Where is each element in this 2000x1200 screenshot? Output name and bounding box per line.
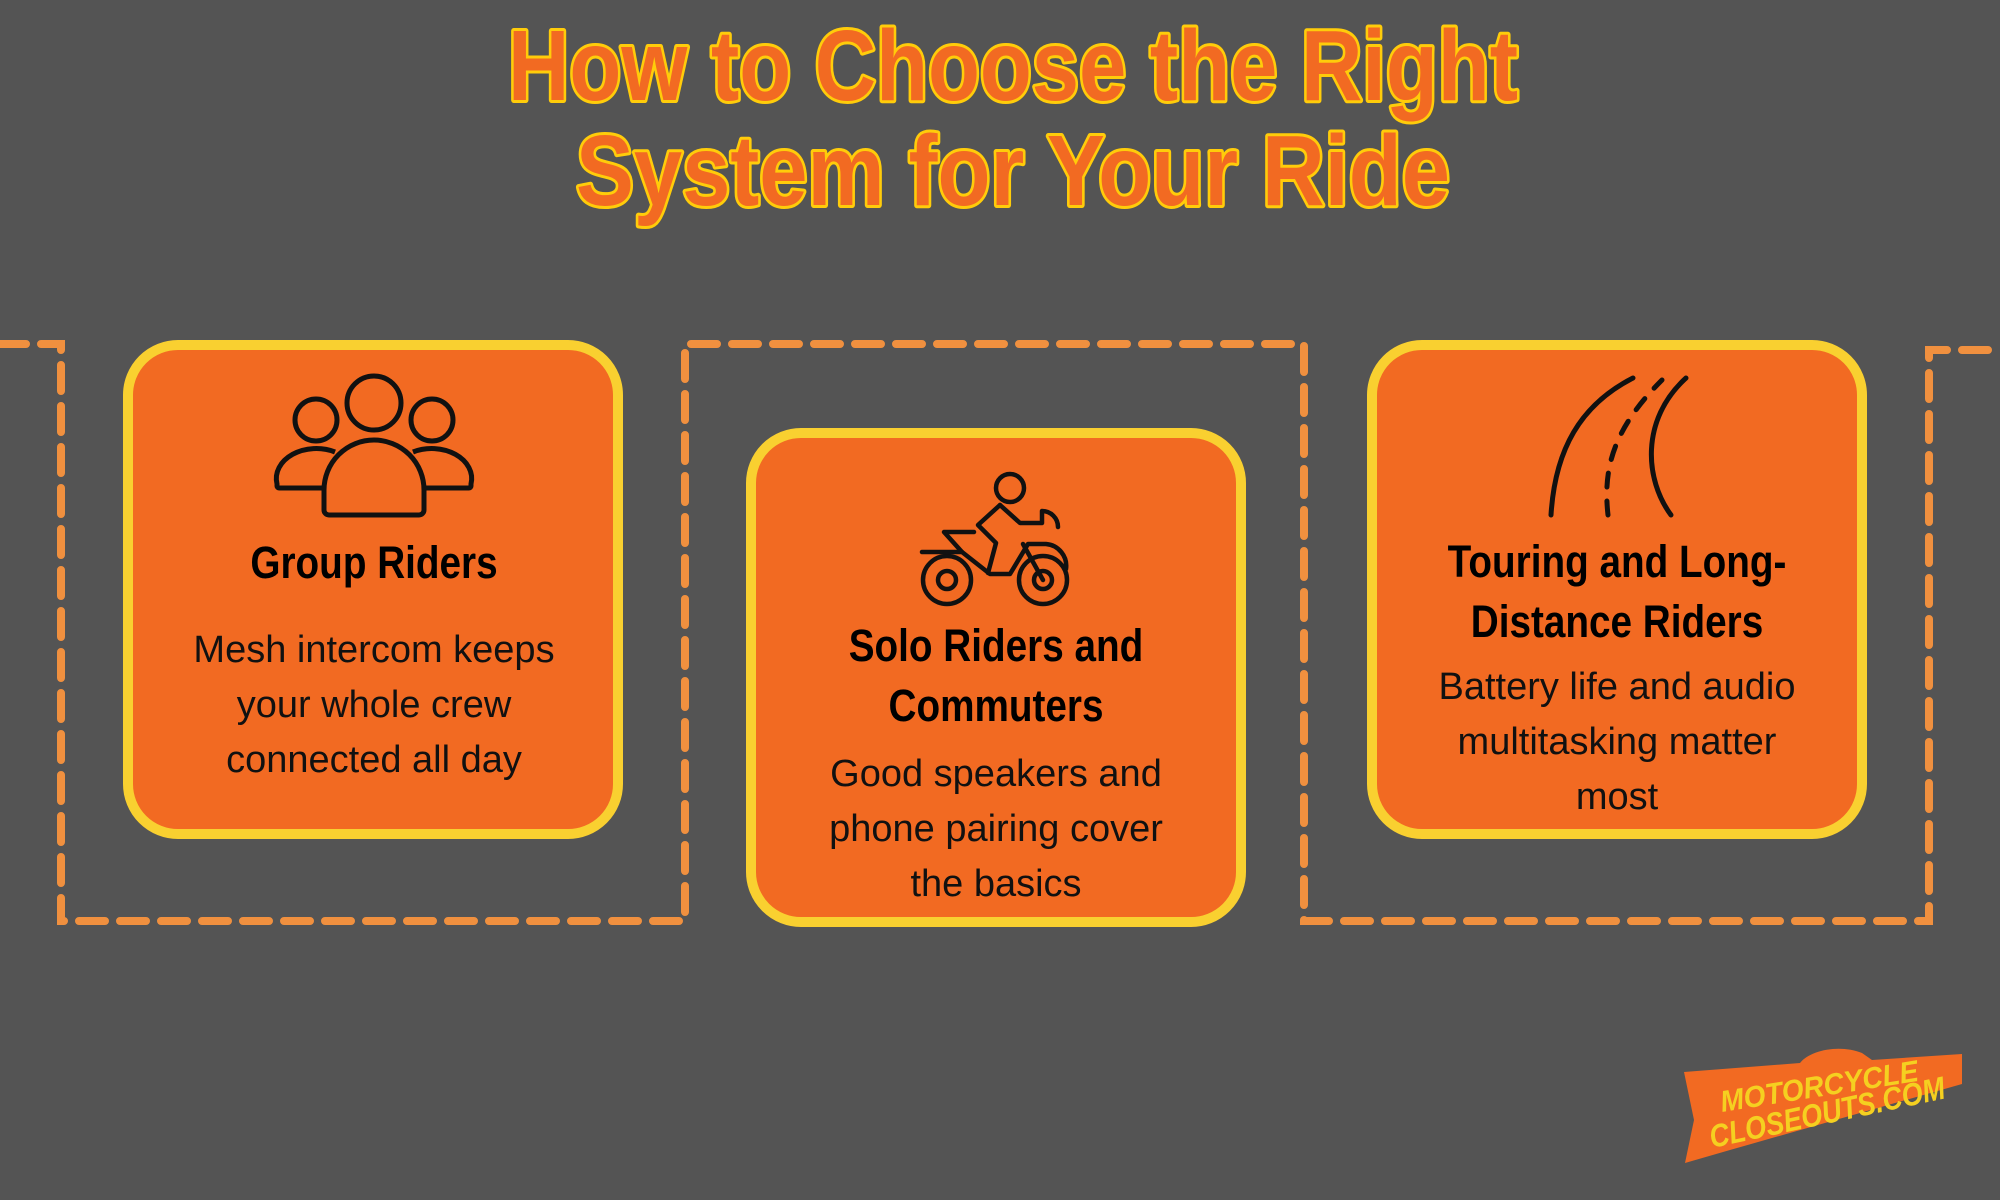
title: System for Your Ride [576, 115, 1450, 227]
text: solo body [829, 753, 1163, 905]
heading: solo riders: Solo Riders and [849, 620, 1143, 671]
dashed connector path [0, 344, 2000, 921]
text: touring body: most [1576, 776, 1659, 818]
heading: group riders: Group Riders [250, 537, 498, 588]
logo: motorcycle closeouts: CLOSEOUTS.COM [1706, 1069, 1949, 1155]
icon: group of people [276, 376, 472, 515]
title [508, 10, 1518, 227]
panel: solo riders [751, 433, 1241, 922]
heading: touring riders [1448, 536, 1786, 647]
text: touring body [1438, 666, 1796, 818]
text: group body: connected all day [226, 739, 522, 781]
text: touring body: multitasking matter [1458, 721, 1777, 763]
logo: motorcycle closeouts: MOTORCYCLE [1718, 1055, 1922, 1119]
panel: touring riders [1372, 345, 1862, 834]
title: How to Choose the Right [508, 10, 1518, 122]
heading: solo riders: Commuters [889, 680, 1103, 731]
text: touring body: Battery life and audio [1438, 666, 1796, 708]
icon: road [1551, 378, 1686, 515]
text: group body: Mesh intercom keeps [193, 629, 555, 671]
text: solo body: Good speakers and [830, 753, 1162, 795]
icon: motorcycle [922, 474, 1067, 604]
text: solo body: phone pairing cover [829, 808, 1163, 850]
heading: solo riders [849, 620, 1143, 731]
text: group body [193, 629, 555, 781]
text: solo body: the basics [910, 863, 1082, 905]
heading: touring riders: Touring and Long- [1448, 536, 1786, 587]
panel: group riders [128, 345, 618, 834]
text: group body: your whole crew [237, 684, 512, 726]
heading: touring riders: Distance Riders [1471, 596, 1763, 647]
logo: motorcycle closeouts [1684, 1049, 1962, 1163]
